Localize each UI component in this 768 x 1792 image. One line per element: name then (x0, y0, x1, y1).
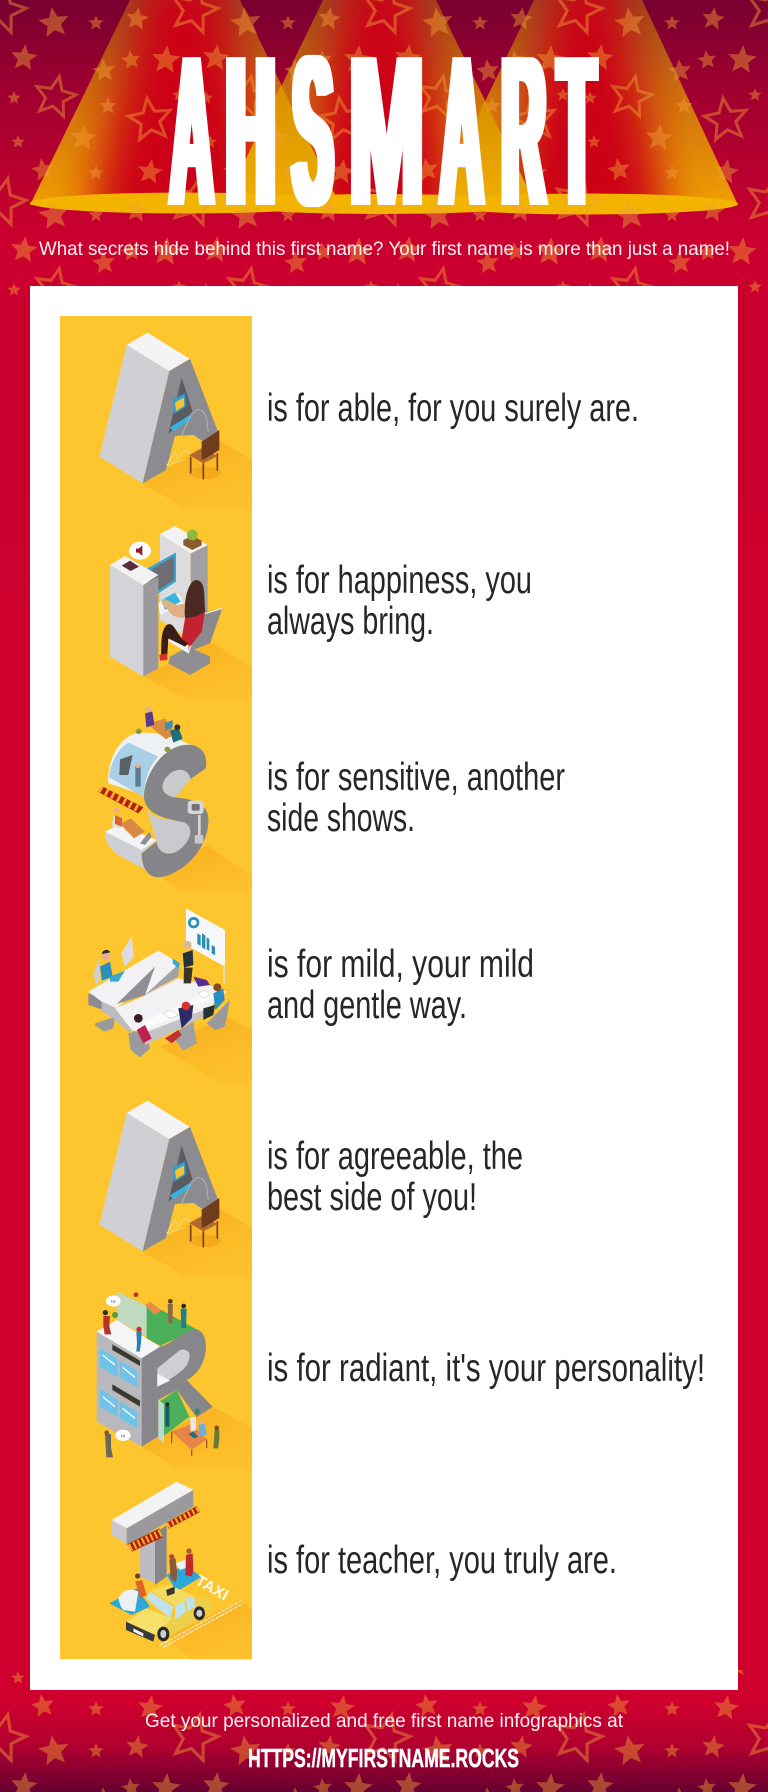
title: H (227, 10, 275, 251)
title: M (349, 10, 424, 251)
icon: letter R: HI (111, 1299, 116, 1304)
caption: S: is for sensitive, another (267, 756, 565, 799)
caption: S: side shows. (267, 797, 415, 840)
star pattern bottom (0, 1670, 768, 1792)
caption: S (267, 756, 565, 840)
title: T (558, 10, 595, 251)
icon: letter T with taxi: TAXI (192, 1572, 231, 1604)
caption: H: is for happiness, you (267, 559, 532, 602)
icon: letter R (97, 1292, 252, 1468)
star pattern top (0, 0, 768, 300)
footer url: HTTPS://MYFIRSTNAME.ROCKS (248, 1743, 519, 1773)
caption: A second: is for agreeable, the (267, 1135, 523, 1178)
icon: letter A (99, 333, 252, 508)
icon: letter A (repeat) (99, 1101, 252, 1276)
icon: letter H (110, 526, 252, 700)
spotlights (30, 0, 738, 235)
title: S (293, 10, 333, 251)
title (167, 10, 599, 251)
title: A (440, 10, 483, 251)
title: R (502, 10, 545, 251)
white panel (30, 286, 738, 1690)
caption: M (267, 943, 534, 1027)
icon: letter T with taxi (109, 1482, 252, 1659)
caption: M: and gentle way. (267, 984, 467, 1027)
footer text: Get your personalized and free first name infographics at (145, 1711, 624, 1732)
yellow illustration strip (60, 316, 252, 1659)
subtitle: What secrets hide behind this first name? Your first name is more than just a name! (39, 239, 730, 260)
icon: letter M (88, 908, 252, 1083)
caption: H (267, 559, 532, 643)
caption: A second (267, 1135, 523, 1219)
icon: letter R: HI (121, 1433, 125, 1438)
title: A (170, 10, 213, 251)
caption: T: is for teacher, you truly are. (267, 1539, 617, 1582)
caption: A: is for able, for you surely are. (267, 387, 639, 430)
icon: letter S (98, 706, 252, 892)
caption: A second: best side of you! (267, 1176, 477, 1219)
caption: M: is for mild, your mild (267, 943, 534, 986)
caption: H: always bring. (267, 600, 434, 643)
